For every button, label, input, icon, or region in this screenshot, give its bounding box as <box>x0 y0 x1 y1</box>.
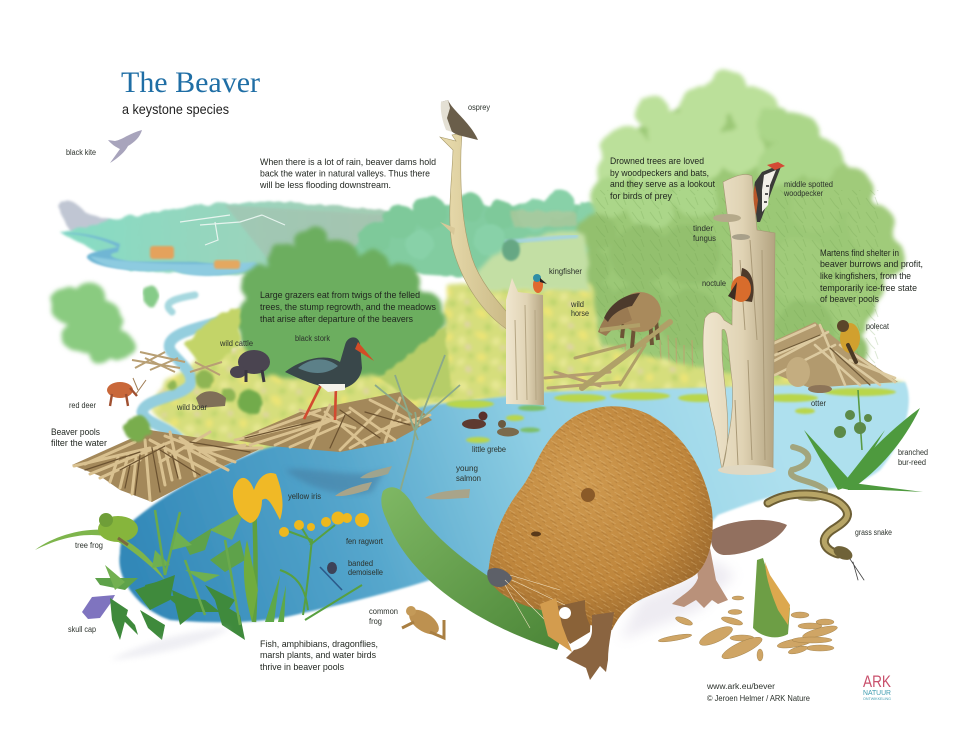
beaver <box>487 406 728 680</box>
text: martens: like kingfishers, from the <box>820 270 911 281</box>
far front paw <box>545 592 592 644</box>
species labels: tinder <box>693 224 713 233</box>
text: large grazers <box>260 289 436 324</box>
meadow shrubs <box>167 371 235 402</box>
far forest <box>345 190 604 285</box>
valley greenery <box>185 308 240 370</box>
beaver hind leg and foot <box>672 548 728 608</box>
text: flooding <box>259 156 436 190</box>
plants: marsh vegetation <box>35 473 369 640</box>
tree frog blade <box>35 530 165 580</box>
species labels: frog <box>369 617 382 626</box>
text: thrive: marsh plants, and water birds <box>260 649 376 660</box>
animal: wild horse <box>598 292 661 348</box>
bird: black stork <box>285 337 374 420</box>
species labels: wild <box>570 300 584 309</box>
fen ragwort <box>279 512 369 620</box>
species labels: little grebe <box>472 445 506 454</box>
willow leaf texture <box>590 190 880 370</box>
species labels: skull cap <box>68 625 97 634</box>
species labels: woodpecker <box>783 189 823 198</box>
species labels: polecat <box>866 322 890 331</box>
text: martens <box>820 247 923 304</box>
text: martens: Martens find shelter in <box>820 247 899 258</box>
species labels: branched <box>898 448 928 457</box>
main beaver pool <box>119 382 909 622</box>
animal: wild boar <box>196 391 226 408</box>
credits: www.ark.eu/bever <box>706 682 775 691</box>
far meadow dam and pond <box>470 210 590 290</box>
felled tree stump <box>753 558 790 637</box>
bush <box>124 415 150 441</box>
animal: polecat <box>837 320 860 362</box>
banded demoiselle <box>320 562 342 590</box>
species labels: young <box>456 464 478 473</box>
text: thrive: thrive in beaver pools <box>260 661 344 672</box>
birds: little grebes <box>462 412 519 436</box>
text: flooding: When there is a lot of rain, beaver dams hold <box>260 156 436 167</box>
green willow log <box>381 487 568 650</box>
animal: red deer <box>107 378 146 406</box>
text: filter water <box>51 426 107 448</box>
bird: middle spotted woodpecker <box>753 162 785 222</box>
text: drowned trees: for birds of prey <box>610 190 672 201</box>
species labels <box>66 103 928 634</box>
text: martens: beaver burrows and profit, <box>820 258 923 269</box>
text: large grazers: that arise after departure of the beavers <box>260 313 413 324</box>
species labels: osprey <box>468 103 490 112</box>
species labels: wild cattle <box>219 339 253 348</box>
beaver nose <box>487 568 512 587</box>
beaver tail <box>711 520 787 555</box>
species labels: horse <box>571 309 589 318</box>
small back dams <box>132 352 222 375</box>
species labels: fungus <box>693 234 716 243</box>
species labels: wild boar <box>176 403 207 412</box>
text: flooding: will be less flooding downstream. <box>259 179 391 190</box>
grass snake <box>768 447 864 580</box>
animal: otter <box>808 385 832 393</box>
credits <box>706 682 810 703</box>
middle tree <box>234 225 445 378</box>
foreground sand shadows <box>110 628 230 660</box>
distant landscape <box>57 201 445 276</box>
water lily pads <box>446 388 896 443</box>
beaver ear <box>581 488 595 502</box>
species labels: tree frog <box>75 541 103 550</box>
credits: © Jeroen Helmer / ARK Nature <box>707 694 810 703</box>
bird: osprey <box>441 100 478 140</box>
text: thrive: Fish, amphibians, dragonflies, <box>260 638 378 649</box>
willow sprig on log <box>375 355 460 492</box>
title: The Beaver <box>121 66 260 99</box>
beaver front leg and paw <box>566 612 614 680</box>
text: drowned trees: Drowned trees are loved <box>610 155 704 166</box>
text: martens: of beaver pools <box>820 293 879 304</box>
animal: wild cattle <box>230 350 270 382</box>
text: large grazers: trees, the stump regrowth, and the meadows <box>260 301 436 312</box>
yellow iris <box>233 473 286 622</box>
drowned tree trunk <box>703 174 776 475</box>
skull cap flower <box>82 595 115 619</box>
species labels: grass snake <box>855 528 892 537</box>
wood chips <box>658 596 838 663</box>
species labels: middle spotted <box>784 180 833 189</box>
species labels: otter <box>811 399 826 408</box>
fish: young salmon <box>335 466 470 499</box>
beaver whiskers <box>505 575 565 628</box>
gnawed wood end at mouth <box>540 598 572 652</box>
beaver lodge: left <box>72 430 262 502</box>
stork reflection <box>285 469 385 494</box>
reeds at tree base <box>625 335 693 385</box>
ARK logo <box>863 672 892 701</box>
text: large grazers: Large grazers eat from twigs of the felled <box>260 289 420 300</box>
beaver dam: middle <box>235 392 432 452</box>
text: thrive <box>260 638 378 672</box>
meadow <box>150 285 905 452</box>
bat: noctule <box>728 268 754 302</box>
big willow tree backdrop <box>574 70 905 388</box>
branched bur-reed <box>804 390 923 492</box>
subtitle: a keystone species <box>122 101 229 117</box>
second house <box>214 260 240 269</box>
species labels: yellow iris <box>288 492 321 501</box>
house with pond <box>150 246 174 259</box>
species labels: black kite <box>66 148 96 157</box>
tree frog <box>98 513 138 545</box>
fallen branch by horse <box>582 322 670 388</box>
bird: kingfisher <box>533 274 547 293</box>
beaver lodge: right <box>765 322 898 388</box>
beaver fur texture <box>488 406 713 630</box>
left tree <box>50 283 133 364</box>
species labels: salmon <box>456 474 481 483</box>
ARK logo: NATUUR <box>863 690 891 697</box>
ARK logo: ARK <box>863 672 892 691</box>
marsh leaves <box>95 510 245 640</box>
species labels: noctule <box>702 279 726 288</box>
common frog <box>402 605 444 639</box>
species labels: demoiselle <box>348 568 383 577</box>
small tree <box>144 285 158 307</box>
osprey dead tree with stump <box>440 133 544 405</box>
text: martens: temporarily ice-free state <box>820 282 917 293</box>
species labels: banded <box>348 559 373 568</box>
species labels: red deer <box>69 401 96 410</box>
tinder fungus <box>713 214 741 222</box>
species labels: fen ragwort <box>346 537 384 546</box>
species labels: common <box>369 607 398 616</box>
text: flooding: back the water in natural valleys. Thus there <box>260 168 430 178</box>
text: drowned trees: by woodpeckers and bats, <box>610 167 709 178</box>
text: drowned trees <box>610 155 715 201</box>
text: filter water: Beaver pools <box>51 426 100 437</box>
beaver eye <box>531 532 541 536</box>
text: drowned trees: and they serve as a lookout <box>610 178 715 189</box>
bird: black kite <box>108 130 142 163</box>
species labels: bur-reed <box>898 458 926 467</box>
beaver dam: back <box>545 322 670 388</box>
winding river <box>142 295 218 438</box>
ARK logo: ONTWIKKELING <box>863 696 891 701</box>
species labels: kingfisher <box>549 267 582 276</box>
beaver body <box>488 406 713 630</box>
text: filter water: filter the water <box>51 437 107 448</box>
species labels: black stork <box>295 334 330 343</box>
